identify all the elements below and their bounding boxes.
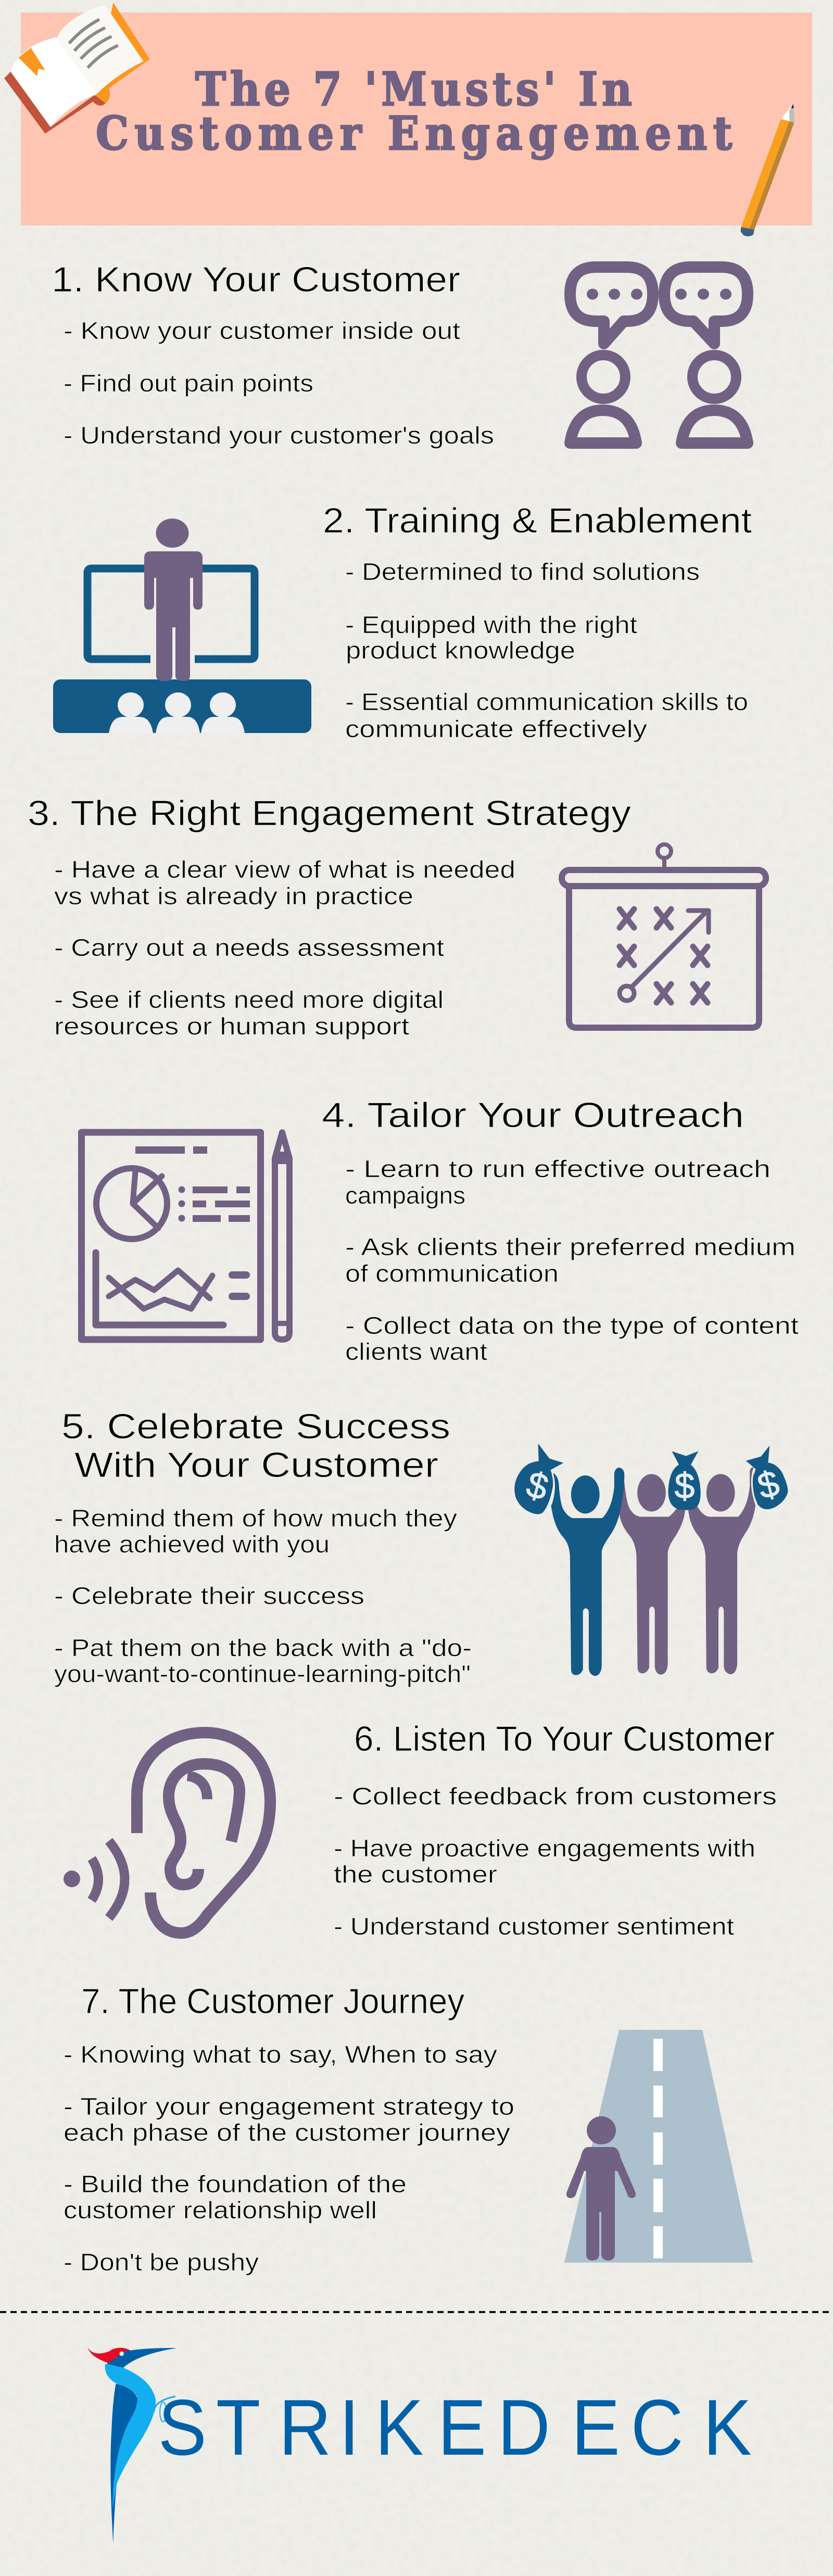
text block 4: - Learn to run effective outreach xyxy=(345,1155,771,1182)
icon: strategy board xyxy=(562,844,766,1028)
text block 3: vs what is already in practice xyxy=(54,882,413,910)
text block 2: - Essential communication skills to xyxy=(345,688,748,715)
wordmark: STRIKEDECK xyxy=(158,2383,752,2471)
logo: StrikeDeck xyxy=(87,2347,752,2543)
section 2: training and enablement xyxy=(53,501,752,742)
section 4: tailor outreach xyxy=(81,1095,799,1365)
text block 4 xyxy=(345,1155,799,1365)
text block 7 xyxy=(64,2041,514,2276)
text block 2: product knowledge xyxy=(346,637,575,664)
icon: three people holding money bags: $ xyxy=(675,1466,695,1506)
heading 1: 1. Know Your Customer xyxy=(52,260,460,299)
text block 3: - Have a clear view of what is needed xyxy=(54,856,515,883)
text block 5: have achieved with you xyxy=(54,1531,330,1558)
heading 4: 4. Tailor Your Outreach xyxy=(322,1095,744,1135)
icon: pencil xyxy=(740,104,794,236)
text block 2: communicate effectively xyxy=(345,715,647,742)
section 1: know your customer xyxy=(52,260,748,449)
text block 3: resources or human support xyxy=(54,1013,409,1040)
text block 4: - Collect data on the type of content xyxy=(345,1312,799,1339)
icon: three people holding money bags: $ xyxy=(522,1463,552,1508)
panel: title banner xyxy=(21,12,812,225)
icon: road with person xyxy=(564,2030,753,2263)
text block 6: the customer xyxy=(334,1861,497,1888)
text block 1 xyxy=(64,317,494,449)
text block 5: - Celebrate their success xyxy=(54,1582,364,1609)
text block 7: - Tailor your engagement strategy to xyxy=(64,2093,514,2120)
icon: trainer and audience xyxy=(53,519,311,733)
icon: ear with sound waves xyxy=(64,1733,270,1933)
text block 3: - Carry out a needs assessment xyxy=(54,934,444,961)
heading 6: 6. Listen To Your Customer xyxy=(354,1719,775,1759)
heading 2: 2. Training & Enablement xyxy=(323,501,752,540)
text block 7: customer relationship well xyxy=(64,2196,377,2224)
text block 3 xyxy=(54,856,515,1040)
title: Customer Engagement xyxy=(96,106,733,160)
section 6: listen to your customer xyxy=(64,1719,777,1940)
heading 5 xyxy=(61,1407,450,1485)
heading 3: 3. The Right Engagement Strategy xyxy=(28,793,631,833)
text block 2: - Equipped with the right xyxy=(345,611,637,638)
text block 7: - Build the foundation of the xyxy=(64,2170,407,2198)
text block 3: - See if clients need more digital xyxy=(54,986,444,1013)
section 7: customer journey xyxy=(64,1981,753,2276)
text block 7: - Don't be pushy xyxy=(64,2249,259,2276)
text block 4: of communication xyxy=(345,1260,559,1287)
icon: three people holding money bags: $ xyxy=(753,1462,784,1507)
icon: two people talking xyxy=(570,267,748,443)
text block 4: campaigns xyxy=(345,1182,465,1209)
heading 5: 5. Celebrate Success xyxy=(61,1407,450,1446)
text block 6: - Collect feedback from customers xyxy=(334,1783,777,1810)
text block 6: - Have proactive engagements with xyxy=(334,1835,755,1862)
text block 4: clients want xyxy=(345,1338,487,1365)
text block 1: - Understand your customer's goals xyxy=(64,422,494,449)
text block 7: each phase of the customer journey xyxy=(64,2119,510,2146)
text block 1: - Find out pain points xyxy=(64,370,313,397)
text block 5 xyxy=(54,1505,472,1687)
text block 5: - Pat them on the back with a "do- xyxy=(54,1634,472,1661)
icon: woodpecker xyxy=(87,2347,177,2543)
text block 7: - Knowing what to say, When to say xyxy=(64,2041,497,2068)
title xyxy=(96,62,733,160)
text block 1: - Know your customer inside out xyxy=(64,317,460,344)
heading 7: 7. The Customer Journey xyxy=(81,1981,464,2021)
icon: open book xyxy=(4,3,150,134)
text block 6: - Understand customer sentiment xyxy=(334,1913,734,1940)
text block 6 xyxy=(334,1783,777,1940)
section 3: engagement strategy xyxy=(28,793,766,1040)
icon: three people holding money bags xyxy=(514,1444,788,1676)
section 5: celebrate success xyxy=(54,1407,788,1687)
heading 5: With Your Customer xyxy=(74,1445,438,1485)
text block 5: - Remind them of how much they xyxy=(54,1505,457,1532)
text block 4: - Ask clients their preferred medium xyxy=(345,1233,796,1260)
text block 2 xyxy=(345,558,748,742)
title: The 7 'Musts' In xyxy=(195,62,632,116)
text block 5: you-want-to-continue-learning-pitch" xyxy=(54,1660,471,1687)
icon: report with charts and pencil xyxy=(81,1132,289,1340)
text block 2: - Determined to find solutions xyxy=(345,558,700,585)
